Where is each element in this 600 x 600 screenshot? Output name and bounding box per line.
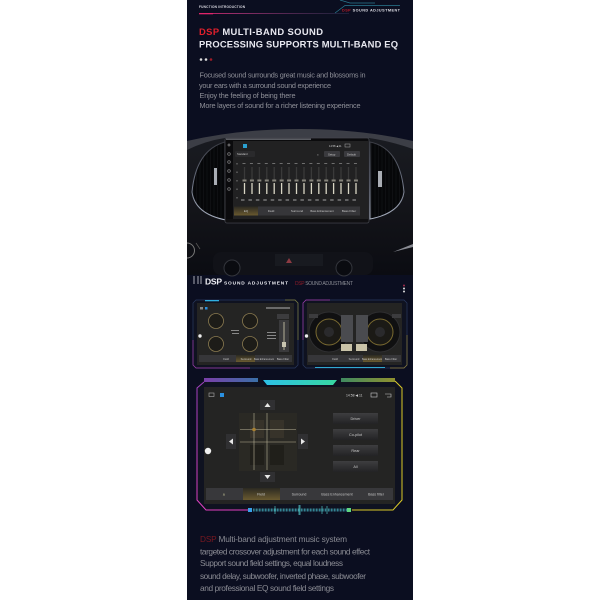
seat buttons: Driver xyxy=(350,417,361,421)
dark page background xyxy=(187,0,413,600)
intro text: your ears with a surround sound experience xyxy=(199,81,331,90)
neon frame xyxy=(197,378,402,510)
status bar xyxy=(209,393,391,398)
seat buttons: All xyxy=(353,465,358,469)
head unit screen: Default xyxy=(347,152,356,156)
head unit screen: 14:58 ◀ 11 xyxy=(329,144,342,148)
title: PROCESSING SUPPORTS MULTI-BAND EQ xyxy=(199,38,398,50)
arrow buttons xyxy=(226,400,308,482)
gauge tab bar: Bass Filter xyxy=(277,357,289,361)
header bar: DSP SOUND ADJUSTMENT xyxy=(342,8,401,12)
panel: speakers screen xyxy=(303,300,407,368)
header bar xyxy=(199,0,401,14)
section heading: DSP sound adjustment: DSP SOUND ADJUSTMENT xyxy=(295,281,353,287)
dashboard lower console xyxy=(187,243,413,276)
air vents xyxy=(192,142,404,220)
screen xyxy=(204,387,395,504)
description text: and professional EQ sound field settings xyxy=(200,583,334,593)
seat buttons: Co-pilot xyxy=(349,433,363,437)
pagination dots xyxy=(200,58,212,61)
head unit screen: Standard xyxy=(237,152,248,156)
title: DSP MULTI-BAND SOUND xyxy=(199,26,323,37)
gauge dials xyxy=(208,314,258,352)
seat buttons: Rear xyxy=(351,449,360,453)
tab bar: Bass filter xyxy=(368,492,385,496)
intro text: Focused sound surrounds great music and blossoms in xyxy=(200,70,366,80)
head unit screen: ≡ xyxy=(317,154,319,156)
tab bar: EQ xyxy=(244,209,249,213)
slider xyxy=(279,320,289,352)
status bar: 14:58 ◀ 11 xyxy=(346,394,363,398)
section heading: DSP sound adjustment: DSP xyxy=(205,276,222,286)
tab bar: Bass Enhancement xyxy=(321,492,353,496)
seat buttons xyxy=(333,413,378,472)
gauge tab bar: Bass Enhancement xyxy=(254,358,274,361)
section heading: DSP sound adjustment: SOUND ADJUSTMENT xyxy=(224,280,288,286)
speakers tab bar: Bass Enhancement xyxy=(362,358,382,361)
description text xyxy=(200,534,371,593)
tab bar: Field xyxy=(268,209,275,213)
intro text: More layers of sound for a richer listening experience xyxy=(200,101,360,110)
tab bar: Bass Filter xyxy=(342,209,356,213)
tab bar: Field xyxy=(257,492,265,496)
speakers tab bar: Bass Filter xyxy=(385,357,397,361)
description text: sound delay, subwoofer, inverted phase, subwoofer xyxy=(200,571,366,581)
panel: gauges screen xyxy=(193,300,298,368)
tab bar: Bass Enhancement xyxy=(310,209,334,213)
tab bar: Surround xyxy=(291,209,304,213)
tab bar xyxy=(206,488,393,500)
description text: DSP Multi-band adjustment music system xyxy=(200,534,347,544)
gauge labels xyxy=(231,330,276,339)
speakers xyxy=(309,312,401,352)
speakers tab bar: Surround xyxy=(349,357,360,361)
gauge tab bar xyxy=(199,355,292,362)
gauge tab bar: Field xyxy=(223,357,229,361)
head unit screen xyxy=(225,138,369,223)
status icons xyxy=(200,307,290,319)
description text: targeted crossover adjustment for each sound effect xyxy=(200,546,371,556)
tab bar xyxy=(234,206,360,216)
infographic canvas xyxy=(187,0,413,600)
seat field grid xyxy=(239,413,297,471)
title xyxy=(199,26,398,50)
intro text: Enjoy the feeling of being there xyxy=(200,91,296,100)
EQ sliders xyxy=(237,163,358,200)
description text: Support sound field settings, equal loudness xyxy=(200,558,343,568)
intro text xyxy=(199,70,366,110)
speakers tab bar xyxy=(308,355,401,362)
gauge tab bar: Surround xyxy=(241,357,252,361)
waveform xyxy=(248,505,351,515)
head unit screen: Setup xyxy=(328,152,336,156)
section heading: DSP sound adjustment xyxy=(194,276,405,292)
tab bar: Surround xyxy=(292,492,306,496)
header bar: FUNCTION INTRODUCTION xyxy=(199,5,246,9)
panel: sound field screen xyxy=(197,378,402,515)
speakers tab bar: Field xyxy=(332,357,338,361)
tab bar: ♟ xyxy=(222,492,226,496)
car dashboard photo xyxy=(187,125,413,276)
sidebar icons xyxy=(228,144,230,190)
